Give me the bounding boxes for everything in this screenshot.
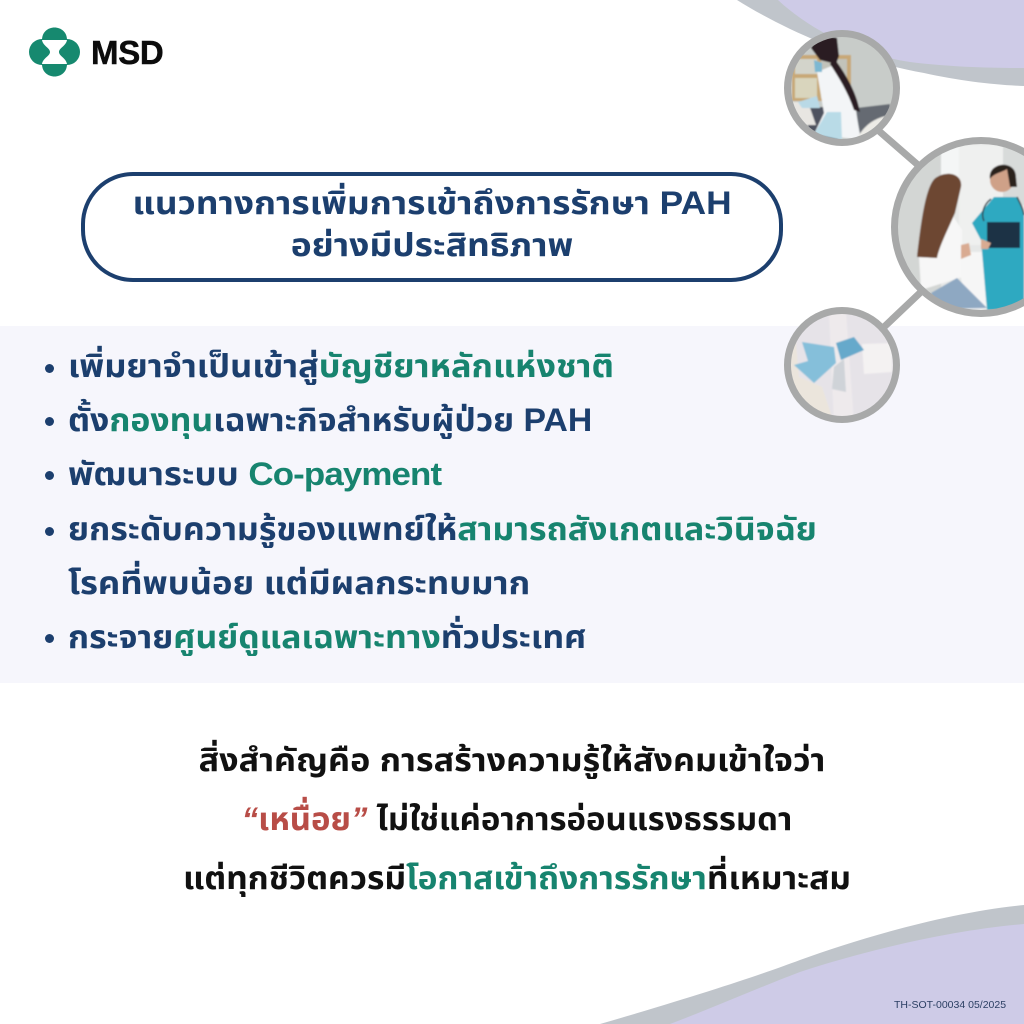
logo wordmark: MSD [91, 34, 163, 71]
closing line 3: แต่ทุกชีวิตควรมีโอกาสเข้าถึงการรักษาที่เหมาะสม [183, 860, 851, 896]
photo: nurse and patient [891, 137, 1024, 317]
bullet 1: เพิ่มยาจำเป็นเข้าสู่บัญชียาหลักแห่งชาติ [68, 348, 614, 384]
bullet 3: พัฒนาระบบ Co-payment [68, 456, 441, 492]
closing line 2: “เหนื่อย” ไม่ใช่แค่อาการอ่อนแรงธรรมดา [242, 801, 792, 837]
heading line 1: แนวทางการเพิ่มการเข้าถึงการรักษา PAH [132, 185, 732, 221]
bullet list [45, 346, 817, 656]
bullet 2: ตั้งกองทุนเฉพาะกิจสำหรับผู้ป่วย PAH [68, 402, 592, 438]
photo: doctor at desk [784, 30, 900, 146]
light band panel [0, 326, 1024, 683]
bullet 5: กระจายศูนย์ดูแลเฉพาะทางทั่วประเทศ [68, 619, 586, 655]
heading box [81, 172, 783, 282]
footer code: TH-SOT-00034 05/2025 [894, 999, 1006, 1011]
bullet 4: โรคที่พบน้อย แต่มีผลกระทบมาก [68, 565, 530, 601]
heading line 2: อย่างมีประสิทธิภาพ [291, 227, 573, 263]
bullet 4: ยกระดับความรู้ของแพทย์ให้สามารถสังเกตและวินิจฉัย [68, 511, 817, 547]
closing statement [183, 740, 851, 897]
logo: MSD [29, 28, 163, 76]
icon: MSD mark [29, 28, 80, 76]
closing line 1: สิ่งสำคัญคือ การสร้างความรู้ให้สังคมเข้าใจว่า [199, 742, 825, 778]
photo: gloved hands [784, 307, 900, 423]
bullet 4 [45, 511, 817, 601]
